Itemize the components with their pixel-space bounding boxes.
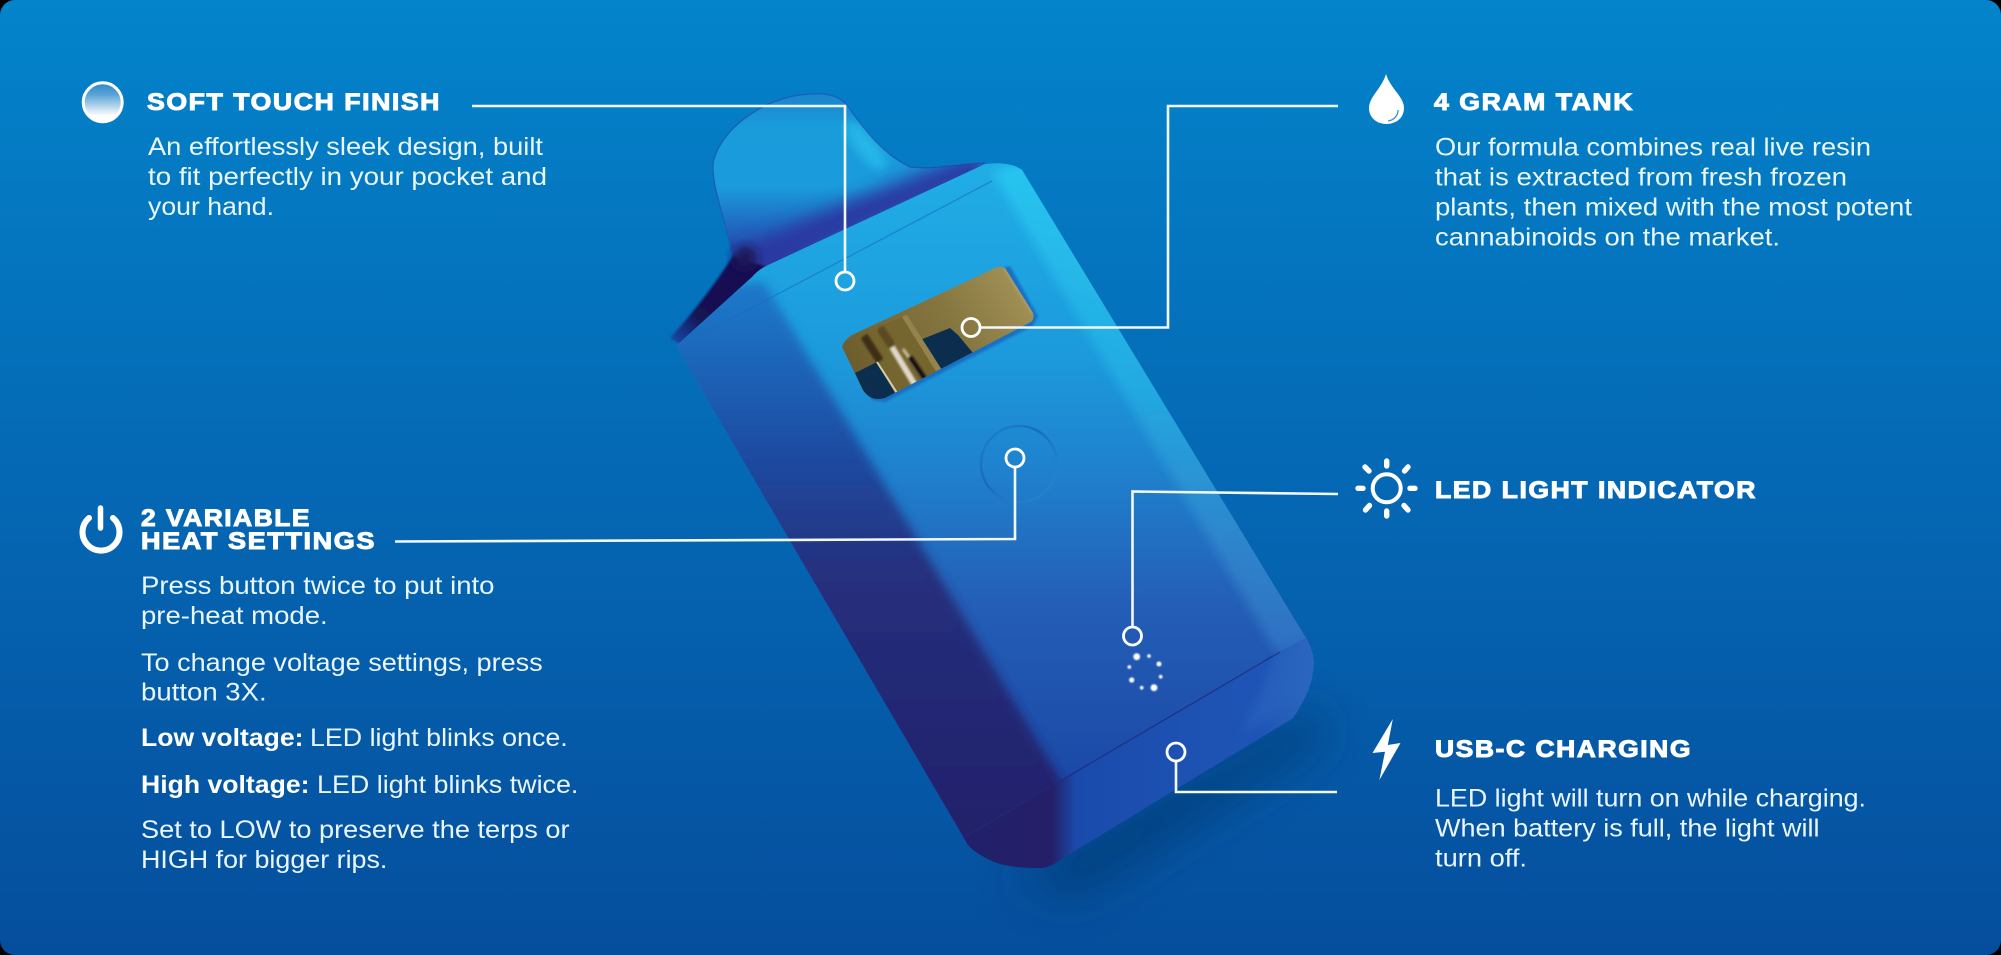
text: soft touch description: to fit perfectly in your pocket and: [148, 163, 547, 191]
icon: water drop: [1369, 74, 1404, 124]
text: heat settings description: LED light blinks twice.: [317, 771, 578, 799]
text: charging description: When battery is full, the light will: [1435, 814, 1820, 842]
leader: LED light: [1124, 492, 1338, 645]
seam lines: [687, 181, 1280, 838]
icon: soft touch sphere: [83, 83, 122, 122]
device mouthpiece: [712, 93, 986, 267]
heading: 2 variable heat settings: 2 VARIABLE: [141, 505, 311, 532]
text: tank description: plants, then mixed with the most potent: [1435, 194, 1912, 222]
text: soft touch description: your hand.: [148, 193, 274, 221]
power button: [981, 426, 1057, 502]
tank window: [842, 266, 1038, 402]
text: tank description: that is extracted from fresh frozen: [1435, 164, 1847, 192]
icon: power: [82, 508, 120, 551]
leader: heat settings: [395, 449, 1024, 542]
text: heat settings description: pre-heat mode.: [141, 602, 328, 630]
device bottom cap: [964, 638, 1314, 868]
device illustration: [670, 93, 1314, 868]
text: heat settings description: High voltage:: [141, 771, 310, 799]
text: heat settings description: Low voltage:: [141, 724, 304, 752]
text: tank description: Our formula combines real live resin: [1435, 134, 1871, 162]
text: heat settings description: LED light blinks once.: [310, 724, 568, 752]
tank liquid dark shapes: [920, 328, 973, 372]
device drop shadow: [1010, 710, 1330, 895]
text: tank description: cannabinoids on the market.: [1435, 224, 1780, 252]
device right facet: [994, 164, 1306, 652]
panel: LED light indicator: [1358, 461, 1757, 516]
heading: LED light indicator: LED LIGHT INDICATOR: [1435, 477, 1757, 504]
heading: 4 gram tank: 4 GRAM TANK: [1434, 89, 1634, 116]
text: soft touch description: An effortlessly sleek design, built: [148, 133, 543, 161]
heading: soft touch finish: SOFT TOUCH FINISH: [147, 89, 441, 116]
heading: 2 variable heat settings: [141, 505, 376, 555]
text: charging description: turn off.: [1435, 844, 1527, 872]
panel: 4 gram tank: [1369, 74, 1912, 252]
panel: heat settings: [82, 505, 578, 874]
text: charging description: LED light will turn on while charging.: [1435, 784, 1866, 812]
leader: soft touch finish: [472, 106, 854, 290]
panel: USB-C charging: [1372, 719, 1866, 872]
text: heat settings description: HIGH for bigger rips.: [141, 846, 387, 874]
heading: USB-C charging: USB-C CHARGING: [1435, 736, 1692, 763]
heading: 2 variable heat settings: HEAT SETTINGS: [141, 528, 376, 555]
icon: lightning bolt: [1372, 719, 1400, 780]
LED light dots: [1128, 653, 1162, 691]
device left facet: [676, 278, 1066, 868]
device front face: [676, 163, 1281, 780]
icon: sun: [1358, 461, 1415, 516]
cap inner highlight: [1258, 702, 1268, 716]
text: heat settings description: To change voltage settings, press: [141, 649, 543, 677]
leader: USB-C: [1167, 743, 1337, 792]
text: heat settings description: Set to LOW to preserve the terps or: [141, 816, 570, 844]
panel: soft touch finish: [83, 83, 547, 221]
text: tank description: [1435, 134, 1912, 252]
dark wedge at mouthpiece base: [670, 246, 770, 344]
text: heat settings description: Press button twice to put into: [141, 572, 494, 600]
leader: 4 gram tank: [962, 106, 1338, 336]
device body: [676, 163, 1314, 868]
tank inner tube: [887, 317, 936, 393]
text: heat settings description: button 3X.: [141, 678, 267, 706]
text: heat settings description: [141, 572, 578, 874]
text: soft touch description: [148, 133, 547, 221]
text: charging description: [1435, 784, 1866, 872]
